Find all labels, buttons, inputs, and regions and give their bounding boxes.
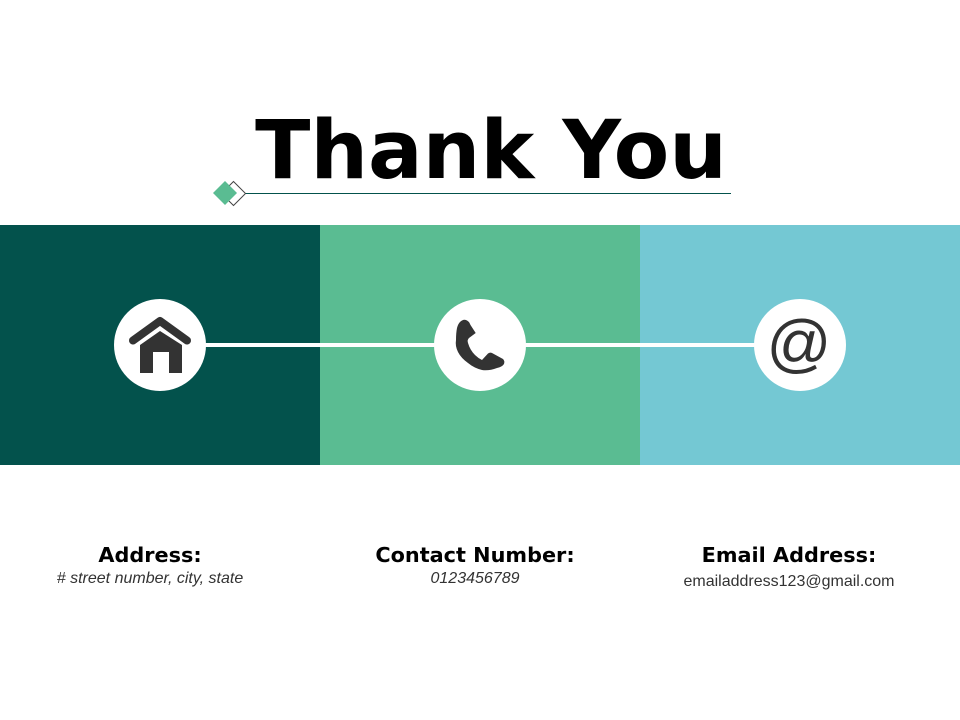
email address block: emailaddress123@gmail.com [684, 573, 894, 590]
address block: # street number, city, state [57, 570, 243, 587]
email address block [684, 543, 894, 590]
title underline with diamonds [213, 181, 731, 206]
panel: email colour band [640, 225, 960, 465]
address block [57, 543, 243, 587]
panel: contact colour band [320, 225, 640, 465]
icon: phone [434, 299, 526, 391]
icon: at sign [754, 299, 846, 391]
contact number block: 0123456789 [431, 570, 520, 587]
contact number block [375, 543, 575, 587]
contact number block: Contact Number: [375, 543, 575, 567]
connector line [200, 343, 760, 347]
icon: home [114, 299, 206, 391]
panel: address colour band [0, 225, 320, 465]
icon: at sign: @ [767, 307, 831, 379]
email address block: Email Address: [702, 543, 876, 567]
address block: Address: [98, 543, 202, 567]
title: Thank You [255, 104, 727, 198]
